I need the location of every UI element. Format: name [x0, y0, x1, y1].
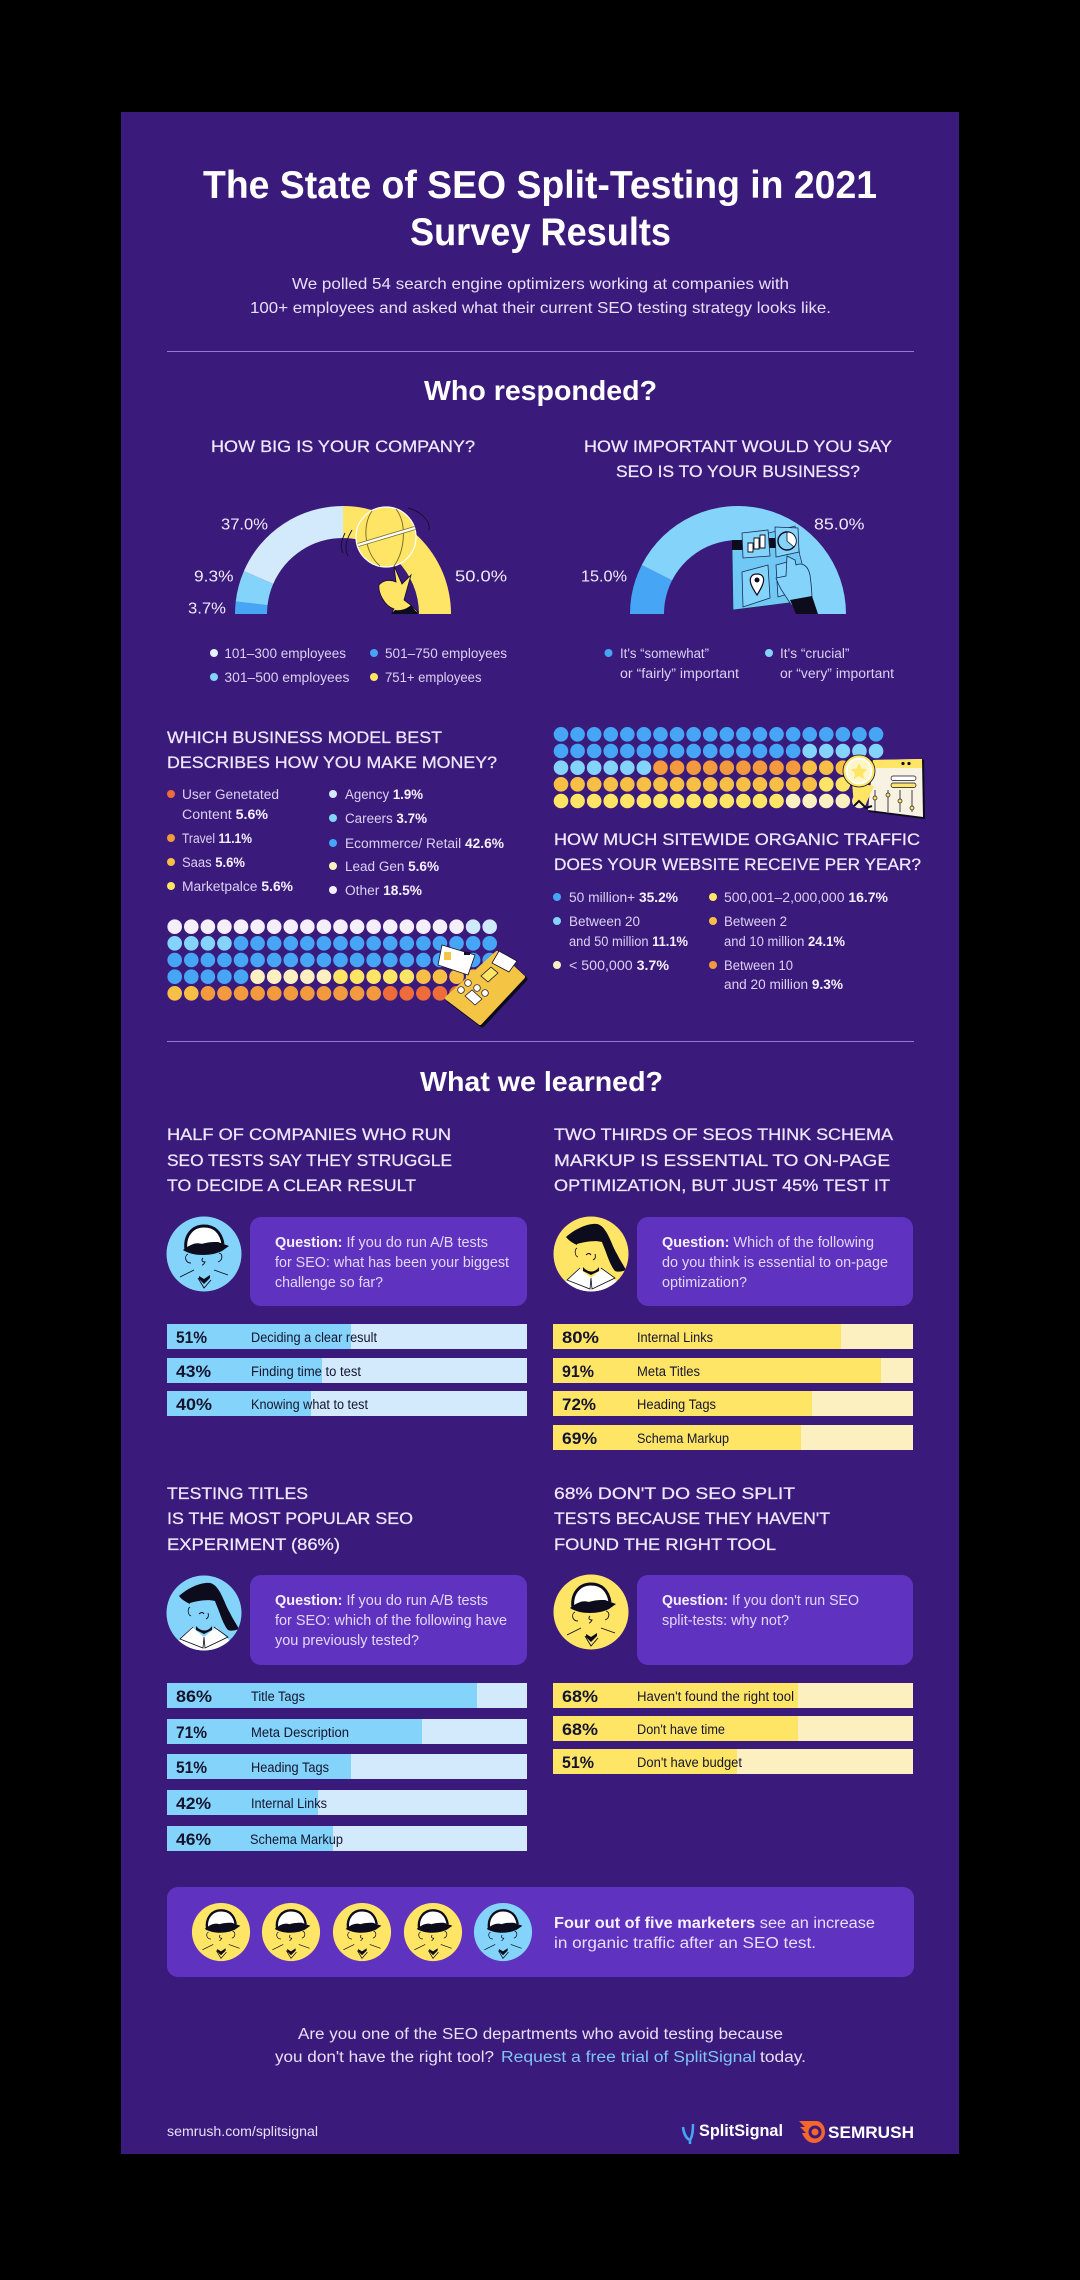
icon: card payment terminal	[438, 945, 525, 1025]
question bubble: Question: If you don't run SEO	[662, 1593, 859, 1609]
infographic canvas	[121, 112, 959, 2154]
bar chart: previously tested	[167, 1683, 527, 1851]
gauge labels: 50.0%	[455, 568, 507, 586]
legend: business model: Saas 5.6%	[182, 855, 245, 870]
question bubble	[250, 1217, 527, 1306]
bar chart: why not: Don't have time	[637, 1722, 725, 1737]
heading: how important is SEO: SEO IS TO YOUR BUSINESS?	[616, 463, 860, 481]
bar chart: previously tested: 51%	[176, 1759, 207, 1777]
question bubble: do you think is essential to on-page	[662, 1255, 888, 1271]
legend: organic traffic: and 10 million 24.1%	[724, 934, 845, 949]
legend: organic traffic: and 50 million 11.1%	[569, 934, 688, 949]
legend: business model	[167, 787, 504, 898]
intro text	[250, 276, 831, 317]
intro text: We polled 54 search engine optimizers working at companies with	[292, 276, 789, 293]
bar chart: why not: 68%	[562, 1688, 598, 1706]
heading: two thirds of SEOs: MARKUP IS ESSENTIAL TO ON-PAGE	[554, 1152, 890, 1170]
question bubble	[637, 1575, 913, 1665]
legend: company size: 501–750 employees	[385, 646, 507, 661]
bar chart: why not: Haven't found the right tool	[637, 1689, 794, 1704]
bar chart: biggest challenge: 51%	[176, 1329, 207, 1347]
bar chart: why not: 51%	[562, 1754, 594, 1772]
heading: what we learned: What we learned?	[420, 1066, 663, 1097]
bar chart: essential on-page: Meta Titles	[637, 1364, 700, 1379]
heading: how important is SEO: HOW IMPORTANT WOULD YOU SAY	[584, 438, 892, 456]
bar chart: essential on-page: Heading Tags	[637, 1397, 716, 1412]
heading: testing titles: IS THE MOST POPULAR SEO	[167, 1510, 413, 1528]
icon: hand spinning globe	[341, 507, 429, 614]
dot chart: organic traffic	[561, 734, 876, 801]
bar chart: biggest challenge: Deciding a clear result	[251, 1330, 377, 1345]
gauge labels: 3.7%	[188, 600, 226, 618]
avatar: man, yellow	[554, 1574, 628, 1650]
legend: organic traffic: Between 10	[724, 958, 793, 973]
question bubble: split-tests: why not?	[662, 1613, 789, 1629]
bar chart: essential on-page: Schema Markup	[637, 1431, 729, 1446]
panel: business model	[167, 729, 525, 1025]
logo: Semrush	[799, 2121, 914, 2143]
avatars: five marketers	[192, 1903, 532, 1961]
icon: award badge and settings window	[843, 755, 924, 818]
question bubble: Question: If you do run A/B tests	[275, 1593, 488, 1609]
heading: business model: WHICH BUSINESS MODEL BEST	[167, 729, 442, 747]
panel: organic traffic	[553, 734, 924, 992]
bar chart: previously tested: Meta Description	[251, 1725, 349, 1740]
legend: organic traffic: 50 million+ 35.2%	[569, 890, 678, 905]
heading: 68 percent don't test: FOUND THE RIGHT TOOL	[554, 1536, 776, 1554]
bar chart: previously tested: Heading Tags	[251, 1760, 329, 1775]
gauge chart: SEO importance	[630, 506, 846, 614]
gauge chart: company size	[235, 506, 451, 614]
heading: organic traffic: HOW MUCH SITEWIDE ORGANIC TRAFFIC	[554, 831, 920, 849]
bar chart: essential on-page: 72%	[562, 1396, 596, 1414]
bar chart: previously tested: 42%	[176, 1795, 211, 1813]
legend: SEO importance	[604, 646, 894, 681]
title: The State of SEO Split-Testing in 2021	[203, 164, 877, 207]
heading: half of companies: SEO TESTS SAY THEY STRUGGLE	[167, 1152, 452, 1170]
background panel	[121, 112, 959, 2154]
bar chart: previously tested: 46%	[176, 1831, 211, 1849]
legend: company size: 751+ employees	[385, 670, 482, 685]
heading: business model: DESCRIBES HOW YOU MAKE MONEY?	[167, 754, 497, 772]
legend: organic traffic: and 20 million 9.3%	[724, 977, 843, 992]
bar chart: why not: Don't have budget	[637, 1755, 742, 1770]
legend: company size: 301–500 employees	[224, 670, 350, 685]
heading: two thirds of SEOs: TWO THIRDS OF SEOS THINK SCHEMA	[554, 1126, 893, 1144]
callout text: Four out of five marketers see an increase	[554, 1915, 875, 1932]
question bubble: for SEO: what has been your biggest	[275, 1255, 509, 1271]
legend: business model: User Genetated	[182, 787, 279, 802]
legend: organic traffic	[553, 890, 888, 992]
legend: organic traffic: Between 2	[724, 914, 787, 929]
logo: SplitSignal	[683, 2122, 783, 2144]
legend: business model: Other 18.5%	[345, 883, 422, 898]
callout: four out of five marketers	[167, 1887, 914, 1977]
legend: business model: Marketpalce 5.6%	[182, 879, 293, 894]
gauge labels	[188, 516, 507, 618]
legend: organic traffic: 500,001–2,000,000 16.7%	[724, 890, 888, 905]
bar chart: previously tested: 86%	[176, 1688, 212, 1706]
call to action text	[275, 2026, 806, 2066]
logo: Semrush: SEMRUSH	[828, 2124, 914, 2142]
gauge labels: 85.0%	[814, 516, 865, 534]
question bubble: Question: If you do run A/B tests	[275, 1235, 488, 1251]
legend: business model: Careers 3.7%	[345, 811, 427, 826]
bar chart: biggest challenge: 43%	[176, 1363, 211, 1381]
bar chart: why not: 68%	[562, 1721, 598, 1739]
heading: half of companies	[167, 1126, 452, 1195]
bar chart: essential on-page: 80%	[562, 1329, 599, 1347]
heading: business model	[167, 729, 497, 772]
panel: clear result finding	[166, 1126, 527, 1416]
legend: company size	[210, 646, 507, 685]
bar chart: essential on-page: 69%	[562, 1430, 597, 1448]
heading: how important is SEO	[584, 438, 892, 481]
logo: SplitSignal: SplitSignal	[699, 2122, 783, 2140]
avatar: man, blue	[166, 1216, 242, 1292]
bar chart: essential on-page	[553, 1324, 913, 1450]
heading: two thirds of SEOs	[554, 1126, 893, 1195]
title: Survey Results	[410, 211, 671, 254]
call to action text: Are you one of the SEO departments who avoid testing because	[298, 2026, 783, 2043]
question bubble	[250, 1575, 527, 1665]
heading: 68 percent don't test	[554, 1485, 830, 1554]
heading: how big is your company: HOW BIG IS YOUR COMPANY?	[211, 438, 475, 456]
heading: organic traffic: DOES YOUR WEBSITE RECEIVE PER YEAR?	[554, 856, 921, 874]
bar chart: previously tested: Title Tags	[251, 1689, 305, 1704]
call to action text: Request a free trial of SplitSignal	[501, 2049, 756, 2066]
panel: testing titles finding	[166, 1485, 527, 1851]
callout text	[554, 1915, 875, 1952]
heading: testing titles	[167, 1485, 413, 1554]
panel: schema markup finding	[553, 1126, 913, 1450]
legend: SEO importance: It's “somewhat”	[620, 646, 709, 661]
bar chart: previously tested: Schema Markup	[250, 1832, 343, 1847]
bar chart: essential on-page: 91%	[562, 1363, 594, 1381]
panel: SEO importance	[581, 438, 894, 681]
heading: 68 percent don't test: 68% DON'T DO SEO SPLIT	[554, 1485, 795, 1503]
legend: business model: Lead Gen 5.6%	[345, 859, 439, 874]
heading: two thirds of SEOs: OPTIMIZATION, BUT JUST 45% TEST IT	[554, 1177, 890, 1195]
avatar: woman, blue	[166, 1576, 242, 1653]
heading: who responded: Who responded?	[424, 375, 657, 406]
bar chart: biggest challenge: 40%	[176, 1396, 212, 1414]
footer url: semrush.com/splitsignal	[167, 2124, 318, 2139]
gauge labels: 9.3%	[194, 568, 234, 586]
gauge labels: 37.0%	[221, 516, 268, 534]
panel: no right tool finding	[553, 1485, 913, 1774]
title	[203, 164, 877, 254]
heading: organic traffic	[554, 831, 921, 874]
panel: company size	[188, 438, 507, 685]
heading: testing titles: EXPERIMENT (86%)	[167, 1536, 340, 1554]
bar chart: biggest challenge	[167, 1324, 527, 1416]
question bubble: Question: Which of the following	[662, 1235, 874, 1251]
legend: company size: 101–300 employees	[224, 646, 346, 661]
question bubble: for SEO: which of the following have	[275, 1613, 507, 1629]
bar chart: biggest challenge: Knowing what to test	[251, 1397, 368, 1412]
legend: SEO importance: It's “crucial”	[780, 646, 850, 661]
bar chart: biggest challenge: Finding time to test	[251, 1364, 361, 1379]
question bubble	[637, 1217, 913, 1306]
bar chart: previously tested: Internal Links	[251, 1796, 327, 1811]
question bubble: you previously tested?	[275, 1633, 419, 1649]
avatar: woman, yellow	[553, 1216, 629, 1294]
legend: SEO importance: or “very” important	[780, 666, 894, 681]
heading: half of companies: HALF OF COMPANIES WHO RUN	[167, 1126, 451, 1144]
legend: business model: Ecommerce/ Retail 42.6%	[345, 836, 504, 851]
call to action text: today.	[760, 2049, 806, 2066]
icon: hand tapping tablet	[732, 526, 818, 614]
legend: SEO importance: or “fairly” important	[620, 666, 739, 681]
bar chart: why not	[553, 1683, 913, 1774]
legend: business model: Travel 11.1%	[182, 831, 252, 846]
heading: testing titles: TESTING TITLES	[167, 1485, 308, 1503]
legend: business model: Agency 1.9%	[345, 787, 423, 802]
callout text: in organic traffic after an SEO test.	[554, 1935, 816, 1952]
legend: organic traffic: < 500,000 3.7%	[569, 958, 669, 973]
question bubble: challenge so far?	[275, 1275, 383, 1291]
call to action text: you don't have the right tool?	[275, 2049, 494, 2066]
question bubble: optimization?	[662, 1275, 747, 1291]
legend: business model: Content 5.6%	[182, 807, 268, 822]
legend: organic traffic: Between 20	[569, 914, 640, 929]
intro text: 100+ employees and asked what their current SEO testing strategy looks like.	[250, 300, 831, 317]
dot chart: business model	[175, 927, 490, 993]
gauge labels	[581, 516, 865, 586]
heading: half of companies: TO DECIDE A CLEAR RESULT	[167, 1177, 416, 1195]
heading: 68 percent don't test: TESTS BECAUSE THEY HAVEN'T	[554, 1510, 830, 1528]
bar chart: previously tested: 71%	[176, 1724, 207, 1742]
bar chart: essential on-page: Internal Links	[637, 1330, 713, 1345]
gauge labels: 15.0%	[581, 568, 627, 586]
